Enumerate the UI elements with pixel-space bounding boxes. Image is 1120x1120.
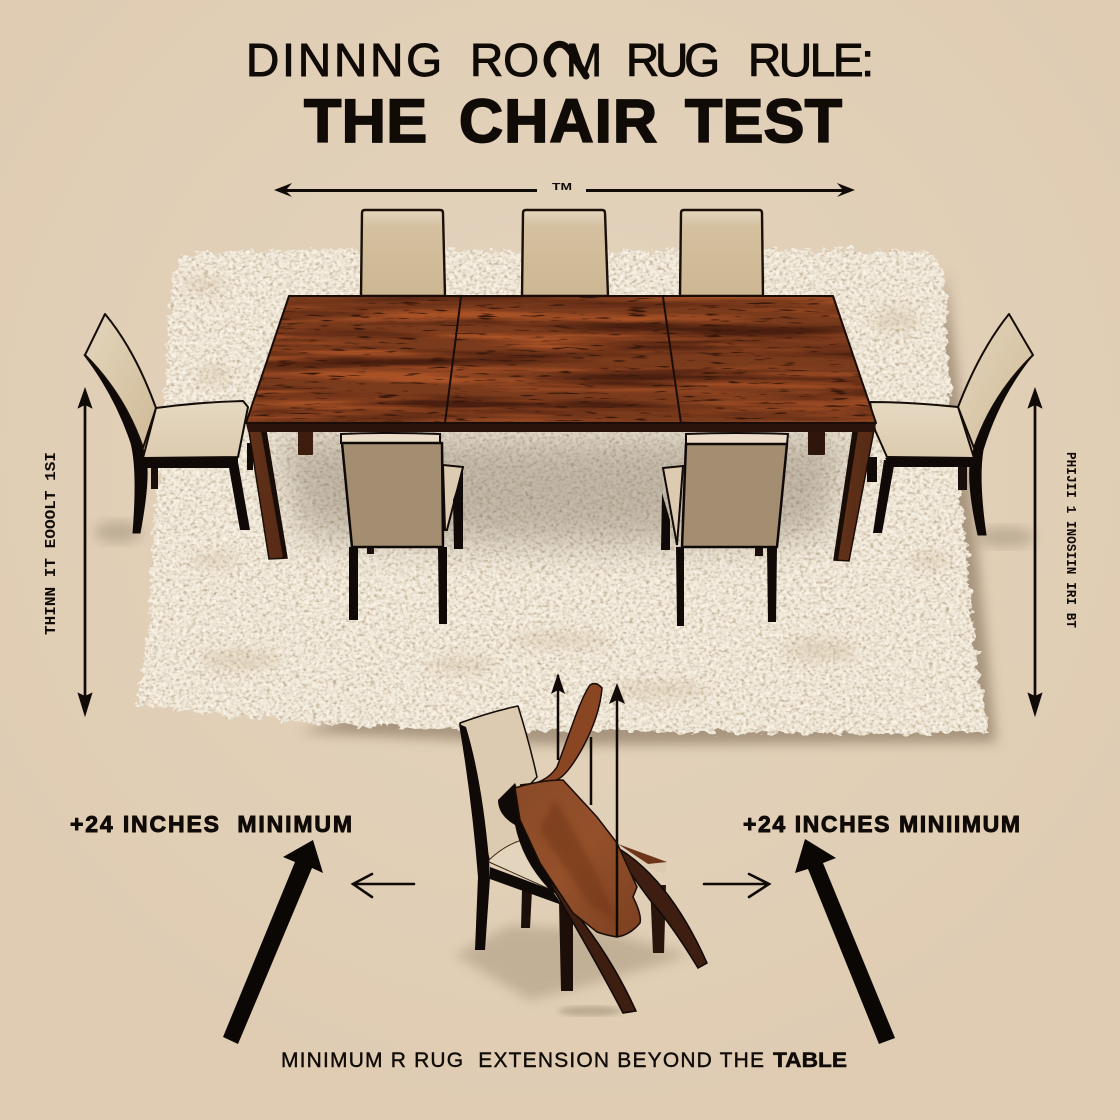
top rim: [341, 433, 440, 443]
table top: [246, 296, 876, 423]
title line one: RULE:: [748, 34, 874, 86]
big right arrow: [795, 839, 895, 1044]
title line two: TEST: [685, 87, 842, 155]
legs: [349, 547, 358, 620]
small right arrow: [704, 874, 769, 897]
shag rug: [137, 249, 988, 734]
title line one: M: [566, 34, 602, 86]
rug tan blotches: [183, 277, 950, 699]
front vertical arrow: [616, 700, 618, 937]
right side chair: [867, 314, 1035, 547]
top dimension arrow: [274, 182, 855, 197]
top dimension label: TM: [552, 182, 572, 193]
left height arrow: [43, 388, 92, 716]
right height label: PHIJII 1 INOSIIN IRI BT: [1062, 452, 1078, 628]
back chairs: [361, 210, 763, 296]
seat edge and rear leg: [443, 465, 463, 530]
wood neck: [520, 684, 602, 785]
front right leg: [834, 425, 875, 561]
chair frame: [84, 354, 147, 533]
bottom caption: TABLE: [773, 1049, 847, 1072]
chair seat: [870, 402, 974, 458]
front left leg: [248, 425, 287, 559]
title: [246, 34, 874, 155]
title line two: THE: [304, 87, 427, 155]
title line one: DINNNG: [246, 34, 442, 86]
front left chair: [341, 433, 463, 624]
title line one: RUG: [626, 34, 720, 86]
title line two: [304, 87, 842, 155]
back panel: [342, 443, 443, 547]
dining table: [246, 296, 876, 561]
floor shadow: [455, 925, 690, 1000]
table seams: [445, 297, 681, 423]
title line one: [246, 34, 874, 86]
chair back 1: [361, 210, 445, 296]
right 24 inches label: +24 INCHES MINIIMUM: [743, 811, 1020, 837]
chair back panel: [85, 314, 156, 448]
big left arrow: [223, 840, 323, 1044]
left height label: THINN IT EOOOLT 1SI: [43, 452, 60, 635]
vertical arrows behind: [558, 675, 591, 805]
black shadow: [498, 783, 570, 905]
shadow under table: [275, 436, 850, 545]
rug shadow: [300, 270, 996, 745]
chair frame: [970, 355, 1033, 535]
front right chair: [661, 433, 788, 626]
back legs: [521, 890, 532, 928]
seat: [489, 840, 556, 892]
title line one: RO: [470, 34, 539, 86]
table edge: [246, 423, 876, 432]
left side chair: [84, 314, 253, 543]
right seat edge: [620, 845, 667, 874]
chair back 3: [680, 210, 763, 296]
far legs: [958, 466, 967, 490]
seat edge and rear leg: [663, 466, 683, 545]
chair seat: [143, 401, 248, 458]
right height arrow: [1028, 388, 1078, 716]
wood body: [515, 780, 640, 937]
bottom tilted chair: [455, 673, 707, 1016]
chair back panel: [958, 314, 1033, 448]
bottom caption: MINIMUM R RUG EXTENSION BEYOND THE: [281, 1049, 764, 1072]
far legs: [151, 466, 158, 489]
back panel: [682, 444, 787, 547]
chair back panel: [460, 706, 537, 860]
chair back 2: [522, 210, 608, 296]
diagonal legs: [545, 875, 636, 1013]
title line two: CHAIR: [459, 87, 657, 155]
back legs: [298, 430, 313, 455]
chair frame: [459, 724, 490, 950]
left 24 inches label: +24 INCHES MINIMUM: [70, 811, 352, 837]
small left arrow: [353, 874, 414, 897]
legs: [676, 547, 684, 626]
top rim: [686, 433, 788, 444]
